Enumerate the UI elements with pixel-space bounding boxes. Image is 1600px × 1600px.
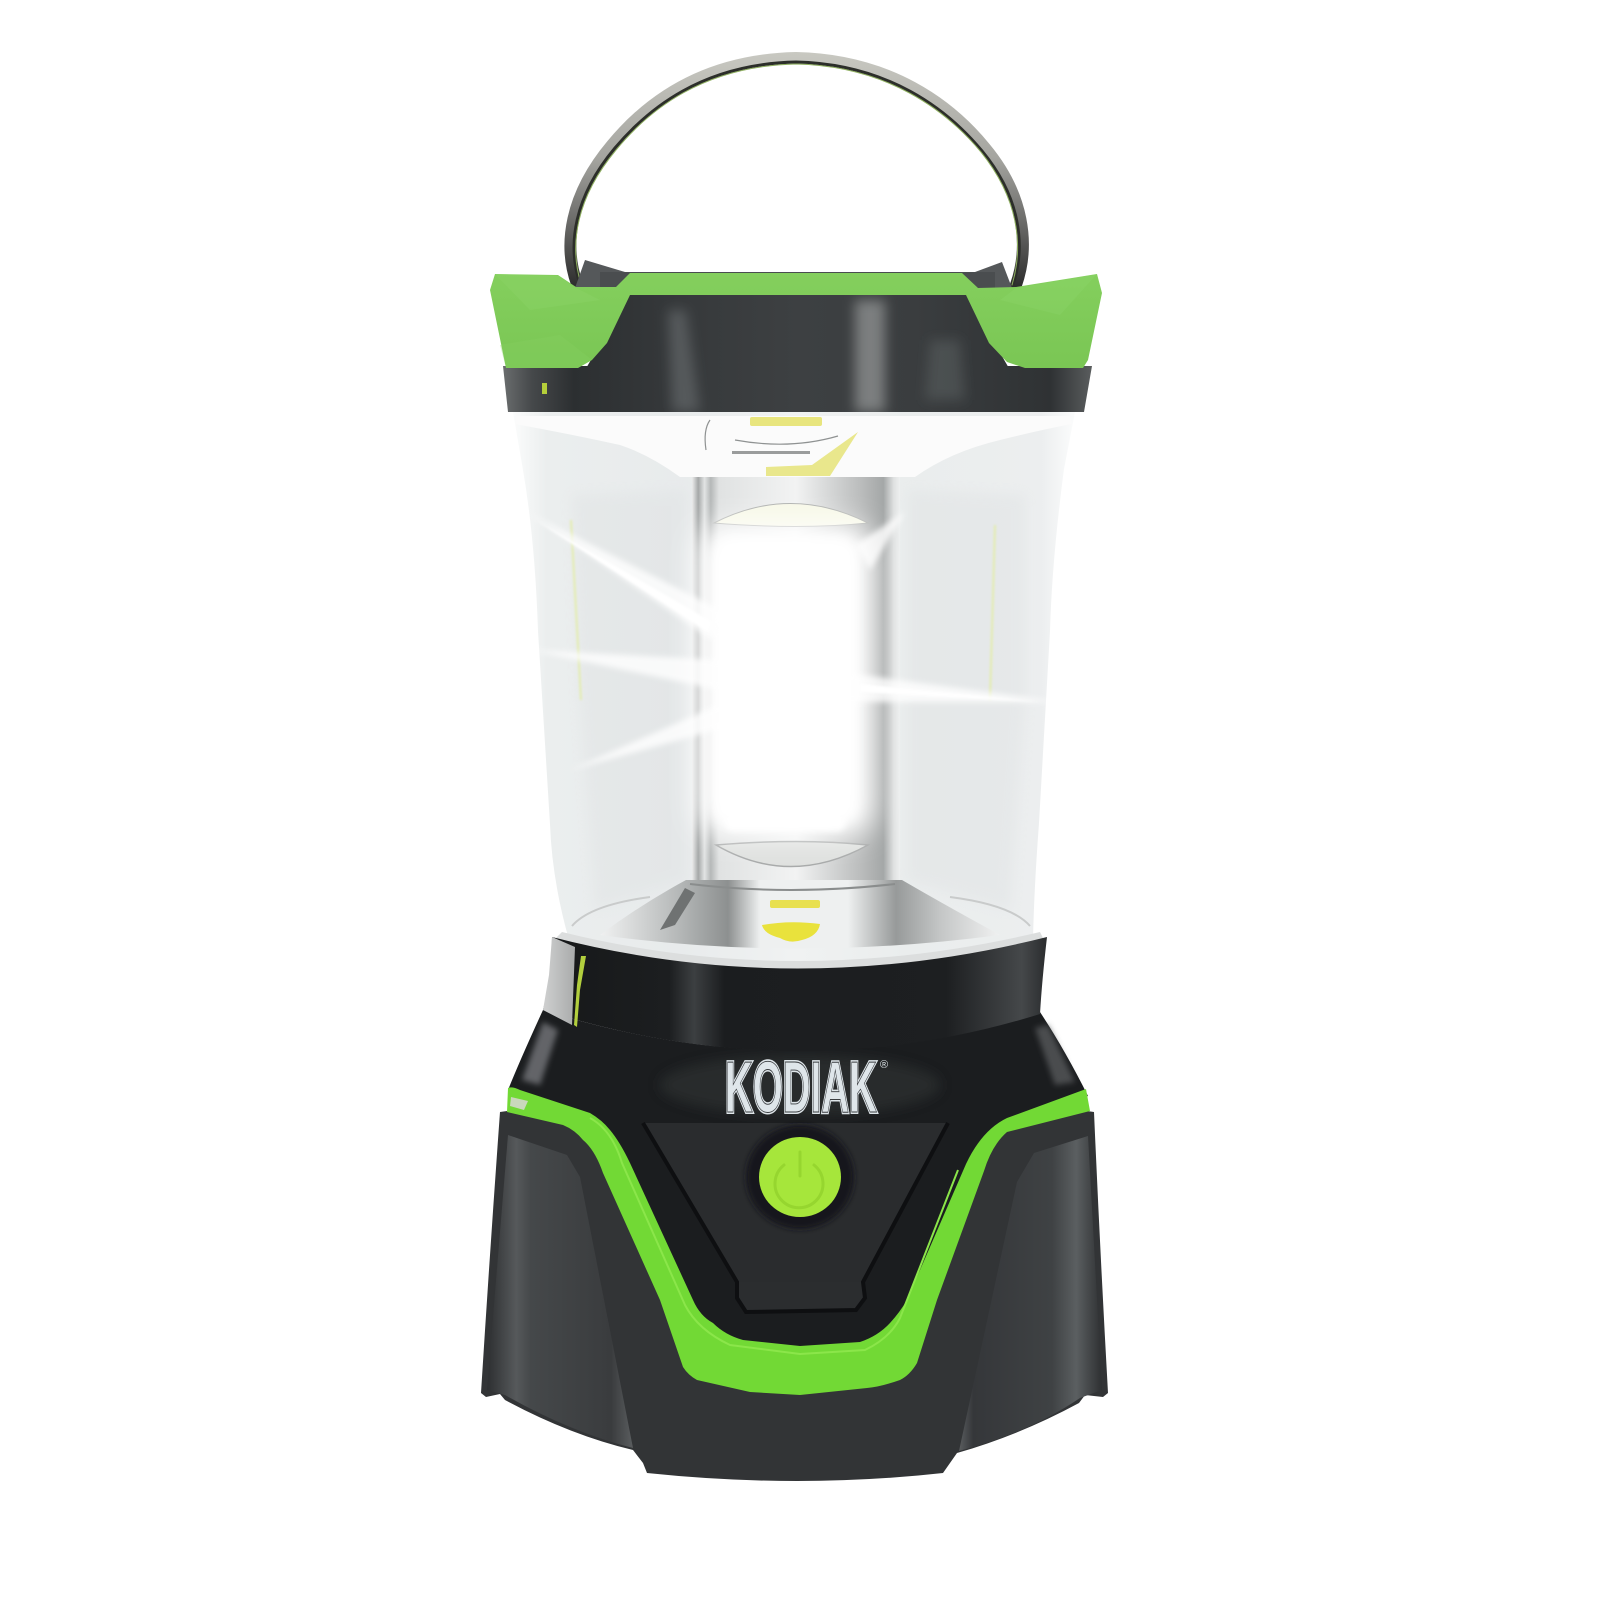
cap top: dark socket wedges — [575, 260, 1012, 298]
lens: gray top bar — [732, 451, 810, 454]
cap: small green reflection — [542, 383, 547, 394]
lens: inner base ring — [572, 897, 1030, 926]
lens: upper collar — [515, 416, 1072, 477]
LED lens caps — [714, 504, 868, 866]
logo: KODIAK wordmark — [725, 1048, 888, 1128]
base: green strip — [507, 1087, 1090, 1395]
base: left side panel — [487, 1135, 633, 1448]
lens: shaded side facets — [572, 490, 1025, 910]
base: button surround shadow — [746, 1125, 854, 1229]
cap: green collar — [490, 273, 1102, 368]
base: center recess — [643, 1123, 948, 1282]
base: lens rim — [554, 932, 1044, 970]
light column — [692, 477, 900, 885]
lantern globe: clear lens — [513, 412, 1075, 965]
lens: green reflections — [571, 480, 995, 700]
base: strip highlight line — [590, 1118, 958, 1354]
logo: KODIAK wordmark: KODIAK — [725, 1048, 877, 1128]
lens: top reflection detail — [705, 420, 838, 450]
base: small pentagon recess — [737, 1282, 865, 1312]
base: neck silver side — [543, 937, 575, 1025]
base: logo area sheen — [660, 1055, 940, 1115]
LED glow — [696, 525, 874, 835]
power button — [759, 1137, 841, 1217]
logo: registered mark: ® — [880, 1059, 888, 1071]
base: strip gloss spot — [510, 1097, 528, 1110]
handle: metal bail — [570, 58, 1023, 285]
cap: light streaks on band — [668, 300, 965, 412]
base: neck — [543, 937, 1047, 1051]
column: base funnel — [600, 880, 1000, 948]
logo: KODIAK wordmark: KODIAK — [725, 1048, 877, 1128]
yellow LED reflections — [750, 417, 858, 942]
base: neck green reflection — [574, 956, 586, 1027]
base: right side panel — [959, 1136, 1102, 1451]
cap: collar facets — [495, 274, 1097, 368]
icon: power symbol — [775, 1152, 823, 1208]
base: foot shell — [481, 1100, 1108, 1481]
base: body shoulder — [508, 1010, 1088, 1365]
cap: dark band — [503, 294, 1092, 412]
light rays — [530, 512, 1060, 770]
base: inner dark V edge — [643, 1123, 948, 1312]
base: shoulder sheens — [522, 1022, 1075, 1085]
